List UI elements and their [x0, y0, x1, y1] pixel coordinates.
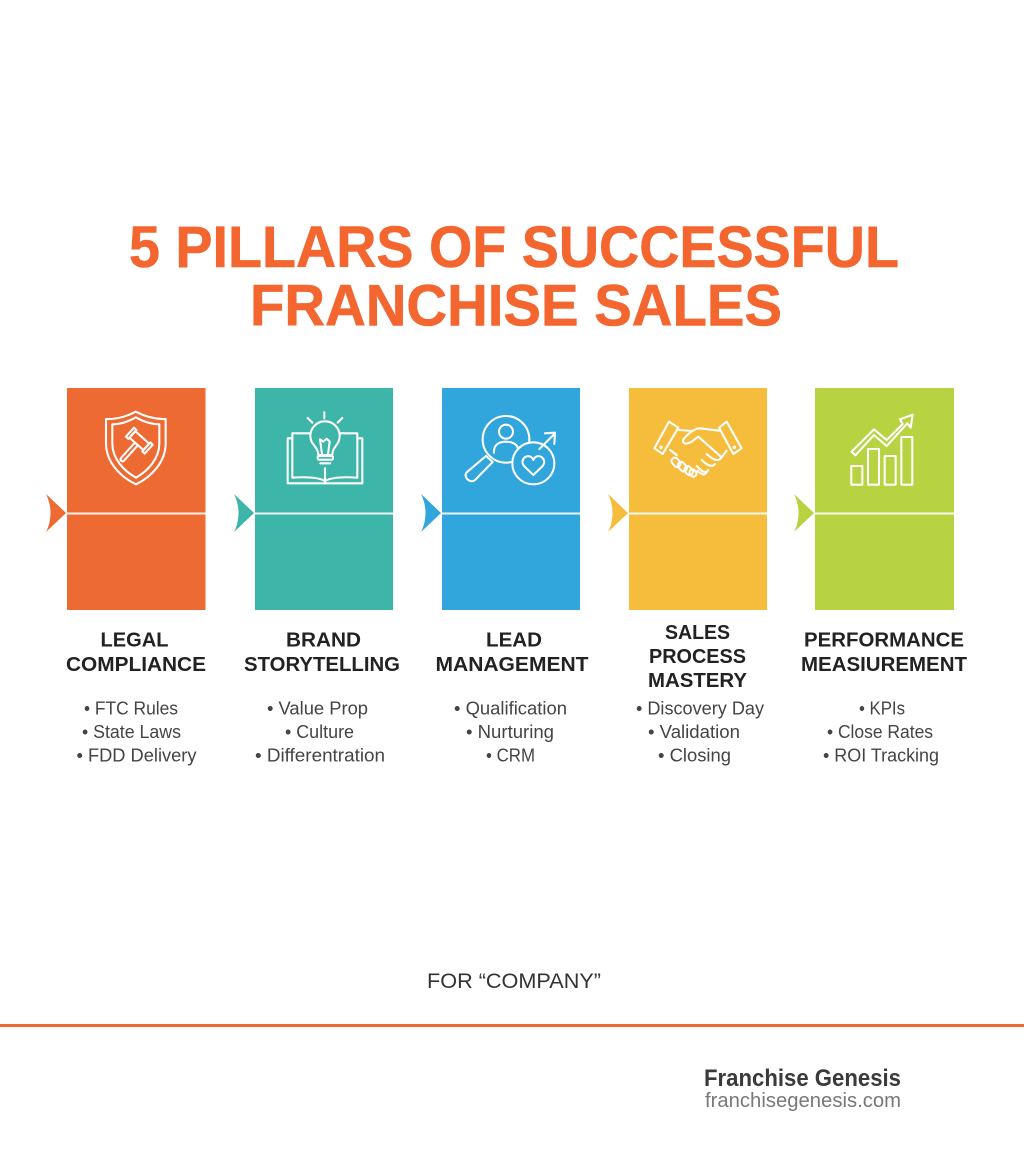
- heading: performance measurement: MEASIUREMENT: [801, 654, 968, 676]
- icon: handshake: [654, 422, 742, 478]
- list: brand storytelling: [255, 698, 385, 766]
- title: [129, 215, 899, 338]
- heading: brand storytelling: [244, 630, 400, 676]
- list: legal compliance: [76, 698, 197, 766]
- heading: sales process mastery: [648, 622, 747, 692]
- footer brand: franchisegenesis.com: [705, 1089, 901, 1112]
- heading: lead management: MANAGEMENT: [436, 654, 589, 676]
- list: legal compliance: • FTC Rules: [84, 698, 178, 718]
- heading: brand storytelling: BRAND: [286, 630, 361, 652]
- list: performance measurement: [823, 698, 939, 766]
- card: legal compliance: [67, 388, 206, 610]
- list: performance measurement: • Close Rates: [827, 721, 933, 742]
- list: lead management: • Nurturing: [466, 721, 554, 742]
- heading: legal compliance: LEGAL: [100, 630, 168, 652]
- heading: sales process mastery: PROCESS: [649, 646, 746, 668]
- panel: lead management: [421, 388, 589, 766]
- panel: legal compliance: [46, 388, 206, 766]
- arrow: performance measurement: [794, 494, 814, 532]
- panel: sales process mastery: [608, 388, 767, 766]
- list: performance measurement: • KPIs: [859, 698, 905, 718]
- list: lead management: • Qualification: [454, 698, 567, 718]
- panel: performance measurement: [794, 388, 968, 766]
- list: sales process mastery: • Validation: [648, 721, 740, 742]
- heading: sales process mastery: SALES: [665, 622, 730, 644]
- list: performance measurement: • ROI Tracking: [823, 744, 939, 766]
- heading: legal compliance: COMPLIANCE: [66, 654, 206, 676]
- arrow: legal compliance: [46, 494, 66, 532]
- icon: open book with light bulb: [288, 412, 362, 483]
- heading: lead management: LEAD: [486, 630, 542, 652]
- card: brand storytelling: [255, 388, 393, 610]
- arrow: brand storytelling: [234, 494, 254, 532]
- list: legal compliance: • State Laws: [82, 721, 181, 742]
- card: sales process mastery: [629, 388, 767, 610]
- footer brand: [704, 1065, 901, 1112]
- list: brand storytelling: • Culture: [285, 721, 354, 742]
- card: performance measurement: [815, 388, 954, 610]
- title: 5 PILLARS OF SUCCESSFUL: [129, 215, 899, 280]
- panel: brand storytelling: [234, 388, 400, 766]
- card: lead management: [442, 388, 580, 610]
- list: sales process mastery: [636, 698, 765, 766]
- icon: bar chart with rising arrow: [851, 415, 913, 485]
- arrow: sales process mastery: [608, 494, 628, 532]
- icon: shield with gavel: [106, 412, 166, 484]
- list: sales process mastery: • Discovery Day: [636, 698, 765, 718]
- heading: sales process mastery: MASTERY: [648, 670, 747, 692]
- heading: legal compliance: [66, 630, 206, 676]
- heading: performance measurement: PERFORMANCE: [804, 630, 964, 652]
- heading: brand storytelling: STORYTELLING: [244, 654, 400, 676]
- list: lead management: • CRM: [486, 744, 535, 766]
- list: legal compliance: • FDD Delivery: [76, 744, 197, 766]
- heading: lead management: [436, 630, 589, 676]
- heading: performance measurement: [801, 630, 968, 676]
- icon: magnifier with person and heart: [466, 416, 555, 484]
- list: sales process mastery: • Closing: [658, 744, 731, 766]
- subtitle: for company: FOR “COMPANY”: [427, 969, 601, 993]
- arrow: lead management: [421, 494, 441, 532]
- footer brand: Franchise Genesis: [704, 1065, 901, 1092]
- list: brand storytelling: • Differentration: [255, 744, 385, 766]
- list: brand storytelling: • Value Prop: [267, 698, 368, 718]
- list: lead management: [454, 698, 567, 766]
- title: FRANCHISE SALES: [250, 274, 782, 338]
